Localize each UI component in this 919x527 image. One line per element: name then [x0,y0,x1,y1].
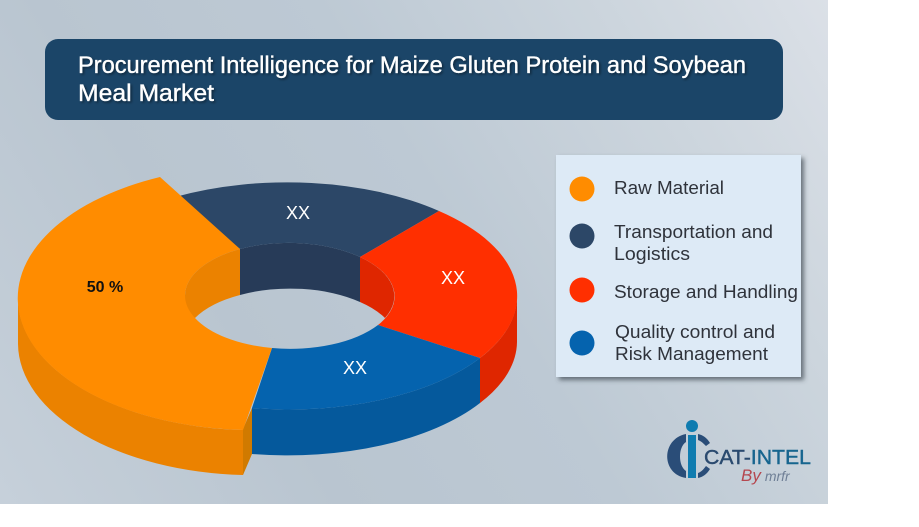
value label: 50 %: 50 % [87,279,123,296]
segment: transportation and logistics (navy) top [175,182,439,257]
title text [78,52,746,107]
logo tagline: By mrfr [741,466,791,485]
segment: storage and handling (red) top [360,211,517,358]
value label: blue XX: XX [343,358,367,378]
legend item: quality control and risk management: Risk Management [615,344,768,364]
title text: Procurement Intelligence for Maize Gluten Protein and Soybean [78,52,746,79]
title banner [45,39,783,120]
segment: raw material (orange) cut face [243,408,252,475]
legend item: storage and handling: Storage and Handling [614,282,798,302]
logo wordmark: CAT-INTEL [704,447,811,469]
legend item: raw material: Raw Material [614,178,724,198]
icon: C mark [667,434,710,478]
inner wall: navy [240,243,360,302]
legend item: raw material [570,176,724,202]
value label: navy XX: XX [286,203,310,223]
segment: raw material (orange) side [18,298,243,475]
3D donut chart [18,177,517,475]
legend item: quality control and risk management [570,322,775,364]
inner wall: red [360,257,394,318]
segment: raw material (orange) top [18,177,272,430]
legend item: quality control and risk management: Quality control and [615,322,775,342]
inner wall: orange [185,249,240,318]
title text: Meal Market [78,80,214,107]
segment: storage and handling (red) side [480,296,517,403]
legend item: transportation and logistics: Transportation and [614,222,773,242]
value label: red XX: XX [441,268,465,288]
segment: quality control (blue) top [252,325,480,409]
legend item: storage and handling [570,278,798,302]
legend panel [556,155,801,377]
icon: i mark [686,420,698,478]
legend item: transportation and logistics: Logistics [614,244,690,264]
logo: CAT-INTEL by mrfr [667,420,811,485]
legend item: transportation and logistics [570,222,773,264]
segment: quality control (blue) side [252,358,480,455]
